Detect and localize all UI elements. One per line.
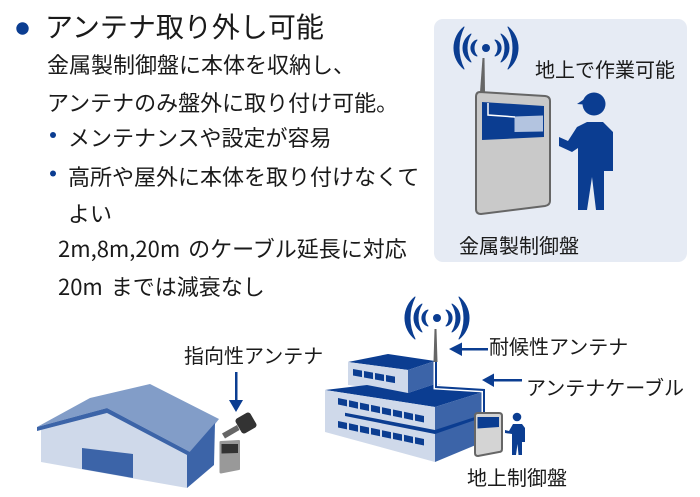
bullet: installation: 高所や屋外に本体を取り付けなくて xyxy=(68,160,419,192)
windows xyxy=(338,369,424,446)
icon: wireless signal xyxy=(454,27,518,69)
label: directional antenna: 指向性アンテナ xyxy=(184,340,323,369)
antenna cable xyxy=(436,362,484,414)
bullet: installation xyxy=(50,160,419,229)
icon: rooftop wireless signal xyxy=(405,297,469,339)
icon: directional antenna xyxy=(222,411,258,438)
arrow: to weatherproof antenna xyxy=(449,342,488,356)
panel: ground-level work xyxy=(434,19,687,262)
label: antenna cable: アンテナケーブル xyxy=(526,372,684,401)
title: アンテナ取り外し可能 xyxy=(45,6,324,46)
icon: metal control panel xyxy=(476,92,550,214)
label: weatherproof antenna: 耐候性アンテナ xyxy=(489,331,628,360)
building xyxy=(325,354,483,462)
arrow: to antenna cable xyxy=(482,374,522,387)
bullet: maintenance: メンテナンスや設定が容易 xyxy=(68,121,332,153)
icon: weatherproof antenna rod xyxy=(434,329,438,362)
icon: small control box xyxy=(220,440,240,474)
warehouse xyxy=(37,384,219,488)
icon: antenna rod xyxy=(480,58,485,92)
label: metal control panel: 金属製制御盤 xyxy=(459,230,579,259)
icon: ground control panel xyxy=(475,413,502,456)
arrow: to directional antenna xyxy=(229,372,243,412)
icon: worker xyxy=(559,92,613,210)
icon: small worker xyxy=(505,413,525,455)
bullet: installation: よい xyxy=(68,197,112,229)
label: ground control panel: 地上制御盤 xyxy=(467,462,567,491)
title bullet xyxy=(16,22,29,35)
label: ground-level work possible: 地上で作業可能 xyxy=(535,54,675,83)
text: description line 2: アンテナのみ盤外に取り付け可能。 xyxy=(47,86,398,118)
text: description line 1: 金属製制御盤に本体を収納し、 xyxy=(47,48,355,80)
text: cable extension: 2m,8m,20m のケーブル延長に対応 xyxy=(58,232,407,264)
text: no attenuation: 20m までは減衰なし xyxy=(58,270,265,302)
